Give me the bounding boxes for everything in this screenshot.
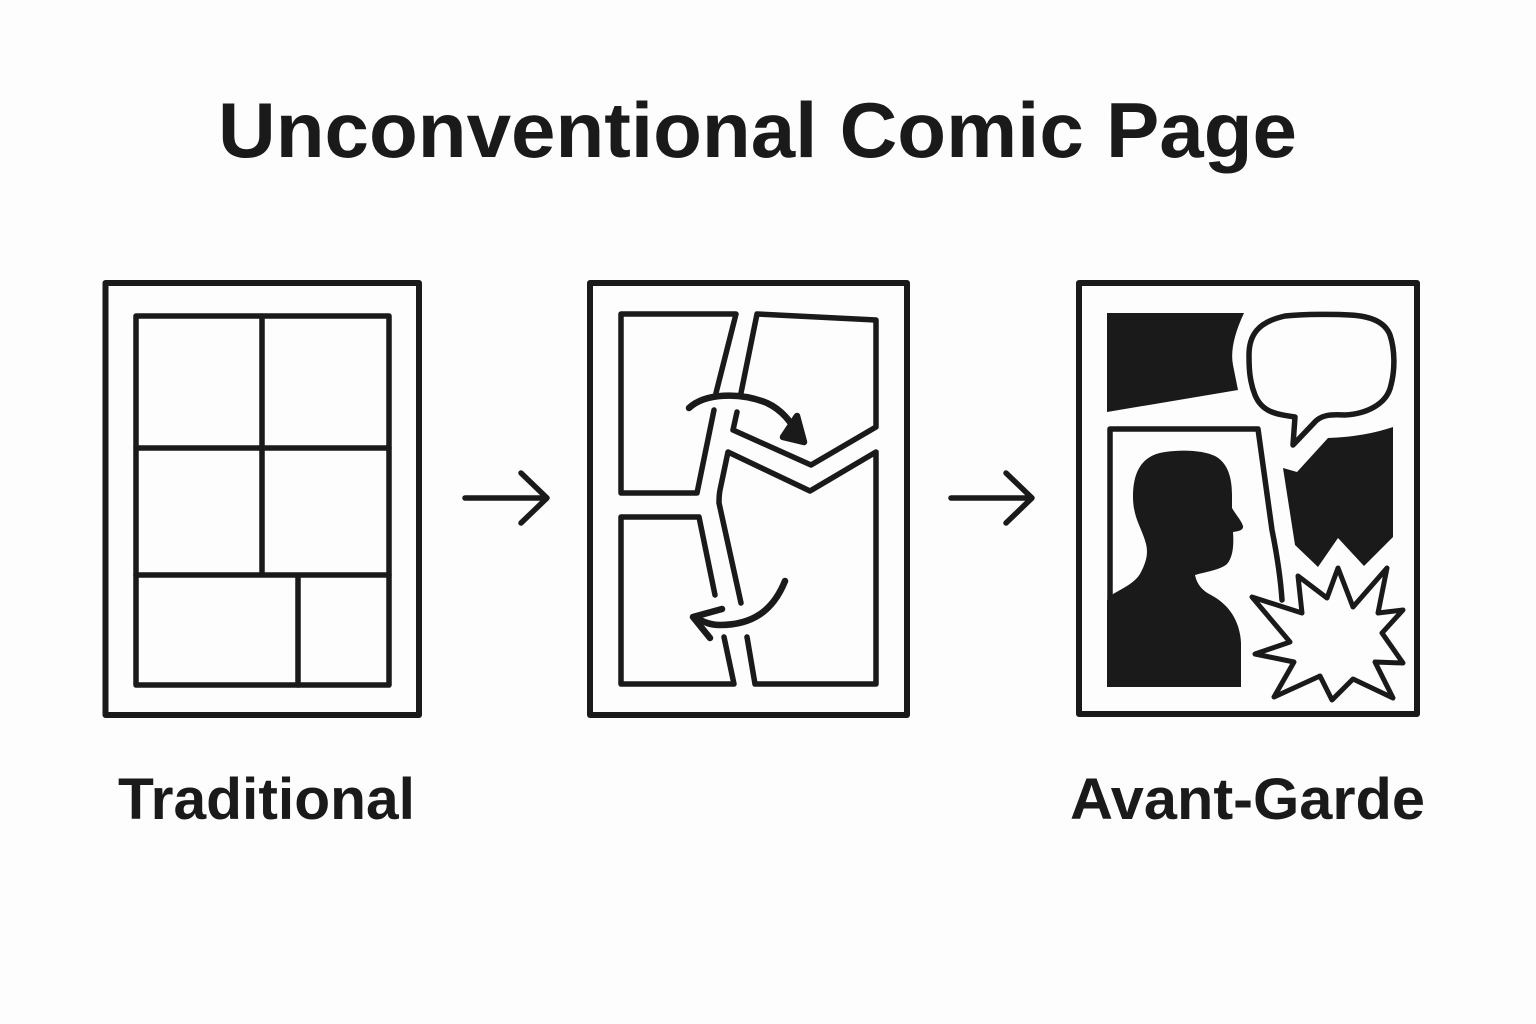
frame line around silhouette (1110, 429, 1282, 600)
arrow: broken layout to avant-garde (951, 473, 1032, 523)
skewed panels (621, 314, 876, 684)
curved arrow: reading flow right (689, 396, 804, 442)
black panel: top (1107, 313, 1244, 412)
panel: traditional page (106, 283, 419, 715)
silhouette: human profile (1107, 451, 1243, 687)
panel: transitional page (590, 283, 907, 715)
page frame: traditional (106, 283, 419, 715)
black panel: right (1283, 427, 1393, 567)
label: traditional: Traditional (118, 767, 415, 832)
page frame: transitional (590, 283, 907, 715)
label: avant-garde: Avant-Garde (1070, 767, 1425, 832)
panel grid: traditional (136, 316, 389, 685)
arrow: traditional to broken layout (465, 473, 547, 523)
title: Unconventional Comic Page (218, 86, 1297, 174)
curved arrow: reading flow left (693, 581, 785, 638)
page frame: avant-garde (1079, 283, 1417, 714)
panel: avant-garde page (1079, 283, 1417, 714)
speech bubble (1249, 314, 1394, 445)
starburst (1252, 568, 1403, 700)
